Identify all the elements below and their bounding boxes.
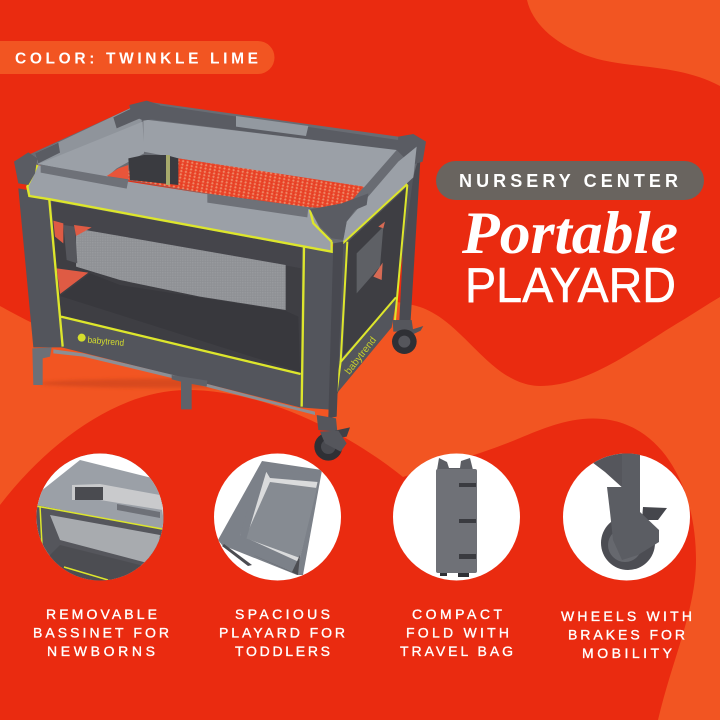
feature 1: bassinet photo — [36, 453, 165, 590]
right side panel — [328, 177, 413, 418]
caption 2 — [219, 606, 345, 659]
right side yellow trim — [337, 184, 407, 392]
caption 2: SPACIOUS — [235, 606, 330, 622]
floor through mesh — [60, 273, 300, 372]
caption 1: BASSINET FOR — [33, 624, 169, 640]
right mesh reflections — [357, 227, 383, 293]
front right post — [328, 242, 343, 418]
caption 2: PLAYARD FOR — [219, 624, 345, 640]
caption 1: REMOVABLE — [46, 606, 157, 622]
back rail — [143, 105, 398, 151]
inner left wall — [38, 122, 144, 177]
mesh band upper — [52, 202, 302, 268]
pill: color — [0, 41, 274, 74]
far-side bassinet mesh — [76, 228, 286, 310]
front panel — [18, 188, 335, 410]
caption 3: TRAVEL BAG — [400, 643, 513, 659]
floor shadow — [40, 379, 307, 388]
caption 1 — [33, 606, 169, 659]
logo — [78, 334, 125, 348]
title: Portable: Portable — [461, 200, 678, 266]
front right wheel assembly — [314, 415, 350, 461]
mattress seen through mesh — [53, 221, 92, 294]
background: middle orange wave — [0, 297, 720, 720]
pill: nursery center — [436, 161, 704, 200]
background: top right orange blob — [527, 0, 720, 86]
front mesh window — [52, 202, 302, 373]
mattress — [128, 158, 364, 208]
logo: babytrend — [87, 335, 125, 348]
feature 4: wheel photo — [563, 453, 690, 580]
front left leg — [32, 347, 52, 385]
back corner cap — [129, 101, 160, 121]
front handles — [41, 165, 308, 217]
front yellow trim — [27, 165, 332, 407]
caption 4: WHEELS WITH — [561, 608, 692, 624]
caption 1: NEWBORNS — [47, 643, 155, 659]
back right corner cap — [397, 134, 426, 165]
right rail sleeve — [343, 147, 417, 243]
pill: nursery center: NURSERY CENTER — [459, 171, 678, 191]
center leg — [172, 375, 207, 409]
caption 4: MOBILITY — [582, 645, 673, 661]
front right corner cap — [310, 193, 368, 240]
product photo: playard — [14, 101, 426, 461]
caption 4 — [561, 608, 692, 661]
feature 3: folded bag photo — [393, 454, 520, 580]
lower frame bars — [53, 349, 315, 415]
back left rail — [35, 108, 142, 165]
crib underlay silhouette — [15, 102, 423, 247]
caption 3 — [400, 606, 513, 659]
pill: color: COLOR: TWINKLE LIME — [15, 50, 258, 68]
back opening — [128, 155, 178, 185]
back right post and wheel — [392, 155, 423, 354]
far-side post — [63, 225, 77, 263]
inner back wall — [143, 119, 397, 187]
right side logo: babytrend — [343, 335, 379, 377]
feature 2: top view photo — [214, 454, 341, 580]
caption 4: BRAKES FOR — [568, 626, 685, 642]
caption 3: FOLD WITH — [406, 624, 509, 640]
caption 3: COMPACT — [412, 606, 502, 622]
front left corner cap — [14, 152, 37, 185]
title: PLAYARD: PLAYARD — [465, 259, 676, 313]
caption 2: TODDLERS — [235, 643, 330, 659]
right side mesh — [343, 187, 407, 357]
front rail sleeve — [27, 165, 332, 252]
